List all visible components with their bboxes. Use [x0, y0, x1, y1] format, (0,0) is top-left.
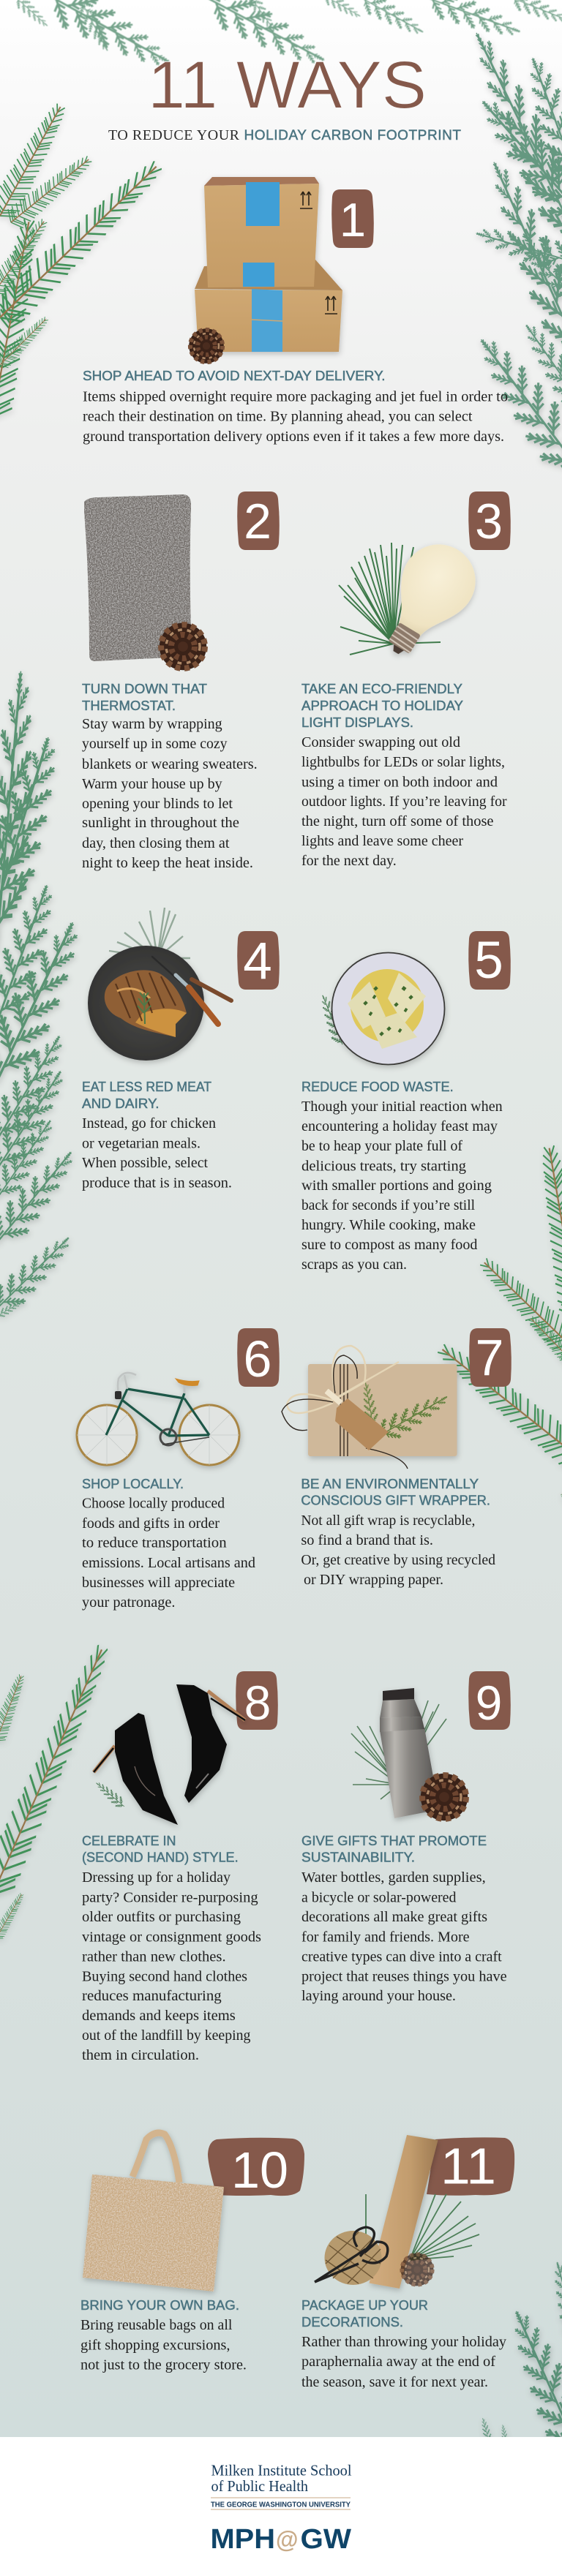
body text: back for seconds if you’re still: [301, 1197, 475, 1213]
heading: CELEBRATE IN: [82, 1834, 176, 1848]
heading: [301, 682, 463, 730]
branches: upper left spruce: [0, 99, 171, 420]
body text: produce that is in season.: [82, 1175, 232, 1191]
body text: not just to the grocery store.: [80, 2357, 247, 2373]
body text: sure to compost as many food: [301, 1237, 477, 1253]
logo: MPH@GW: @: [276, 2526, 299, 2553]
icon: pine needles: [366, 2194, 479, 2260]
body text: Instead, go for chicken: [82, 1115, 216, 1131]
body text: outdoor lights. If you’re leaving for: [301, 794, 507, 810]
body text: lightbulbs for LEDs or solar lights,: [301, 754, 505, 770]
logo: MPH@GW: MPH: [211, 2524, 275, 2555]
body text: [82, 1496, 255, 1611]
body text: encountering a holiday feast may: [301, 1118, 498, 1134]
branches: upper right cedar: [453, 22, 562, 485]
body text: businesses will appreciate: [82, 1575, 235, 1591]
heading: DECORATIONS.: [301, 2315, 403, 2330]
title block: [108, 48, 461, 143]
body text: reach their destination on time. By planning ahead, you can select: [83, 408, 473, 424]
body text: with smaller portions and going: [301, 1178, 492, 1194]
panel: tip 9 sustainable gifts: [301, 1671, 511, 2004]
heading: GIVE GIFTS THAT PROMOTE: [301, 1834, 487, 1848]
body text: foods and gifts in order: [82, 1515, 220, 1532]
number badge 1: [331, 189, 374, 248]
panel: tip 6 shop locally: [77, 1328, 280, 1611]
heading: EAT LESS RED MEAT: [82, 1080, 211, 1094]
number badge 11: [427, 2137, 514, 2196]
body text: the season, save it for next year.: [301, 2374, 488, 2390]
body text: for family and friends. More: [301, 1929, 470, 1946]
logo: Milken Institute School: [211, 2461, 352, 2509]
body text: ground transportation delivery options even if it takes a few more days.: [83, 429, 504, 445]
body text: them in circulation.: [82, 2047, 199, 2063]
icon: herb sprig: [314, 992, 351, 1048]
number badge 2: 2: [244, 494, 271, 549]
logo: Milken Institute School: of Public Health: [211, 2477, 308, 2495]
heading: CONSCIOUS GIFT WRAPPER.: [301, 1494, 490, 1508]
heading: TAKE AN ECO-FRIENDLY: [301, 682, 462, 696]
heading: [301, 2298, 428, 2330]
icon: pine cone: [160, 623, 206, 670]
heading: [301, 1477, 490, 1508]
body text: rather than new clothes.: [82, 1948, 226, 1965]
body text: Dressing up for a holiday: [82, 1869, 231, 1886]
body text: Stay warm by wrapping: [82, 716, 222, 732]
body text: your patronage.: [82, 1594, 176, 1611]
heading: (SECOND HAND) STYLE.: [82, 1850, 239, 1865]
body text: reduces manufacturing: [82, 1988, 222, 2004]
body text: When possible, select: [82, 1155, 208, 1171]
number badge 8: 8: [244, 1676, 271, 1730]
body text: Though your initial reaction when: [301, 1099, 503, 1115]
body text: Rather than throwing your holiday: [301, 2334, 506, 2350]
heading: [82, 1080, 211, 1111]
body text: [301, 1869, 507, 2004]
heading: [82, 682, 207, 713]
body text: Not all gift wrap is recyclable,: [301, 1513, 475, 1529]
heading: PACKAGE UP YOUR: [301, 2298, 428, 2313]
icon: black high heels: [94, 1684, 245, 1825]
body text: laying around your house.: [301, 1988, 456, 2004]
body text: out of the landfill by keeping: [82, 2027, 250, 2044]
number badge 5: [468, 931, 511, 990]
body text: Or, get creative by using recycled: [301, 1552, 495, 1568]
logo: MPH@GW: GW: [300, 2524, 351, 2555]
subtitle: [108, 127, 461, 143]
branches: lower right cedar: [478, 2259, 562, 2461]
heading: SHOP LOCALLY.: [82, 1477, 184, 1491]
number badge 3: [468, 492, 511, 550]
body text: [301, 1513, 495, 1588]
heading: BRING YOUR OWN BAG.: [80, 2298, 239, 2313]
body text: Choose locally produced: [82, 1496, 225, 1512]
body text: Consider swapping out old: [301, 734, 460, 750]
logo: Milken Institute School: THE GEORGE WASHINGTON UNIVERSITY: [211, 2501, 351, 2509]
body text: Buying second hand clothes: [82, 1969, 247, 1985]
body text: emissions. Local artisans and: [82, 1555, 255, 1571]
panel: tip 3 light displays: [301, 492, 511, 869]
body text: [301, 2334, 506, 2390]
icon: pine cone: [421, 1774, 468, 1820]
body text: vintage or consignment goods: [82, 1929, 261, 1946]
number badge 10: [208, 2138, 304, 2199]
icon: pine cone: [189, 328, 224, 364]
footer: [0, 2437, 562, 2576]
body text: Water bottles, garden supplies,: [301, 1869, 486, 1886]
body text: or vegetarian meals.: [82, 1135, 201, 1151]
icon: bicycle: [77, 1373, 239, 1465]
heading: APPROACH TO HOLIDAY: [301, 698, 463, 713]
body text: day, then closing them at: [82, 835, 230, 851]
body text: hungry. While cooking, make: [301, 1217, 476, 1233]
body text: so find a brand that is.: [301, 1532, 433, 1548]
logo: MPH@GW: [211, 2524, 351, 2555]
number badge 8: [236, 1671, 278, 1730]
body text: [82, 1115, 232, 1191]
heading: [301, 1834, 487, 1865]
body text: opening your blinds to let: [82, 796, 233, 812]
body text: [82, 716, 258, 871]
subtitle: HOLIDAY CARBON FOOTPRINT: [244, 128, 461, 143]
number badge 6: [237, 1328, 280, 1387]
body text: gift shopping excursions,: [80, 2337, 230, 2353]
heading: BE AN ENVIRONMENTALLY: [301, 1477, 479, 1491]
body text: night to keep the heat inside.: [82, 855, 253, 871]
number badge 3: 3: [475, 494, 503, 549]
heading: REDUCE FOOD WASTE.: [301, 1080, 454, 1094]
branches: lower left spruce: [0, 1640, 119, 1941]
body text: [82, 1869, 261, 2063]
icon: wrapped gift: [282, 1346, 457, 1469]
body text: using a timer on both indoor and: [301, 774, 498, 790]
panel: tip 7 gift wrapper: [282, 1328, 512, 1588]
icon: knit blanket: [84, 494, 192, 661]
body text: blankets or wearing sweaters.: [82, 756, 258, 772]
body text: creative types can dive into a craft: [301, 1948, 502, 1965]
icon: steel thermos: [380, 1688, 439, 1818]
body text: scraps as you can.: [301, 1257, 407, 1273]
body text: sunlight in throughout the: [82, 815, 239, 831]
icon: kraft paper roll: [369, 2135, 438, 2289]
heading: TURN DOWN THAT: [82, 682, 207, 696]
number badge 9: 9: [476, 1676, 502, 1730]
body text: [301, 1099, 503, 1273]
body text: [80, 2317, 247, 2373]
icon: pine needles: [339, 543, 441, 655]
icon: pine needles: [351, 1701, 446, 1799]
body text: older outfits or purchasing: [82, 1909, 241, 1925]
body text: decorations all make great gifts: [301, 1909, 487, 1925]
body text: Warm your house up by: [82, 776, 222, 792]
subtitle: TO REDUCE YOUR: [108, 127, 240, 143]
number badge 10: 10: [231, 2142, 288, 2199]
icon: twine ball: [325, 2231, 382, 2285]
body text: [83, 389, 508, 445]
branches: top cedar garland: [10, 0, 562, 84]
body text: the night, turn off some of those: [301, 813, 494, 829]
number badge 2: [237, 492, 280, 550]
body text: or DIY wrapping paper.: [304, 1572, 443, 1588]
icon: light bulb: [364, 531, 489, 671]
panel: tip 10 own bag: [80, 2133, 304, 2373]
title: 11 WAYS: [148, 48, 427, 123]
icon: fork and knife: [152, 957, 231, 1024]
number badge 9: [468, 1671, 511, 1730]
number badge 11: 11: [441, 2137, 496, 2194]
body text: be to heap your plate full of: [301, 1138, 462, 1154]
number badge 4: [237, 931, 280, 990]
branches: lower left cedar: [0, 669, 100, 1322]
number badge 6: 6: [244, 1330, 271, 1387]
heading: SUSTAINABILITY.: [301, 1850, 415, 1865]
icon: burlap tote bag: [83, 2133, 224, 2291]
body text: Items shipped overnight require more packaging and jet fuel in order to: [83, 389, 508, 405]
body text: to reduce transportation: [82, 1535, 227, 1551]
body text: paraphernalia away at the end of: [301, 2354, 495, 2370]
body text: party? Consider re-purposing: [82, 1890, 258, 1906]
panel: tip 4 red meat: [82, 908, 280, 1191]
number badge 7: 7: [476, 1329, 503, 1386]
body text: [301, 734, 507, 869]
heading: [82, 1834, 239, 1865]
panel: tip 5 food waste: [301, 931, 511, 1273]
number badge 5: 5: [474, 932, 503, 990]
heading: AND DAIRY.: [82, 1096, 160, 1111]
body text: for the next day.: [301, 853, 397, 869]
body text: lights and leave some cheer: [301, 833, 463, 849]
number badge 7: [469, 1328, 512, 1387]
icon: stacked cardboard boxes: [195, 177, 342, 352]
body text: a bicycle or solar-powered: [301, 1890, 457, 1906]
panel: tip 11 package decorations: [301, 2135, 514, 2390]
heading: THERMOSTAT.: [82, 698, 176, 713]
number badge 4: 4: [243, 933, 272, 990]
body text: Bring reusable bags on all: [80, 2317, 233, 2333]
body text: yourself up in some cozy: [82, 736, 227, 752]
body text: delicious treats, try starting: [301, 1159, 466, 1175]
body text: demands and keeps items: [82, 2008, 236, 2024]
panel: tip 8 second hand style: [82, 1671, 278, 2063]
icon: scissors: [315, 2227, 388, 2282]
heading: SHOP AHEAD TO AVOID NEXT-DAY DELIVERY.: [83, 369, 385, 383]
number badge 1: 1: [340, 193, 366, 246]
icon: pine cone: [401, 2253, 433, 2286]
panel: tip 1 shop ahead: [83, 177, 508, 445]
icon: pine needles behind plate: [109, 908, 190, 958]
logo: Milken Institute School: Milken Institute School: [211, 2461, 352, 2479]
heading: LIGHT DISPLAYS.: [301, 715, 413, 730]
icon: plate with ravioli: [332, 952, 445, 1065]
body text: project that reuses things you have: [301, 1969, 507, 1985]
icon: sprig under shoe: [92, 1778, 129, 1812]
panel: tip 2 thermostat: [82, 492, 280, 871]
icon: plate with steak: [88, 946, 204, 1061]
branches: right middle spruce: [430, 1143, 562, 1520]
